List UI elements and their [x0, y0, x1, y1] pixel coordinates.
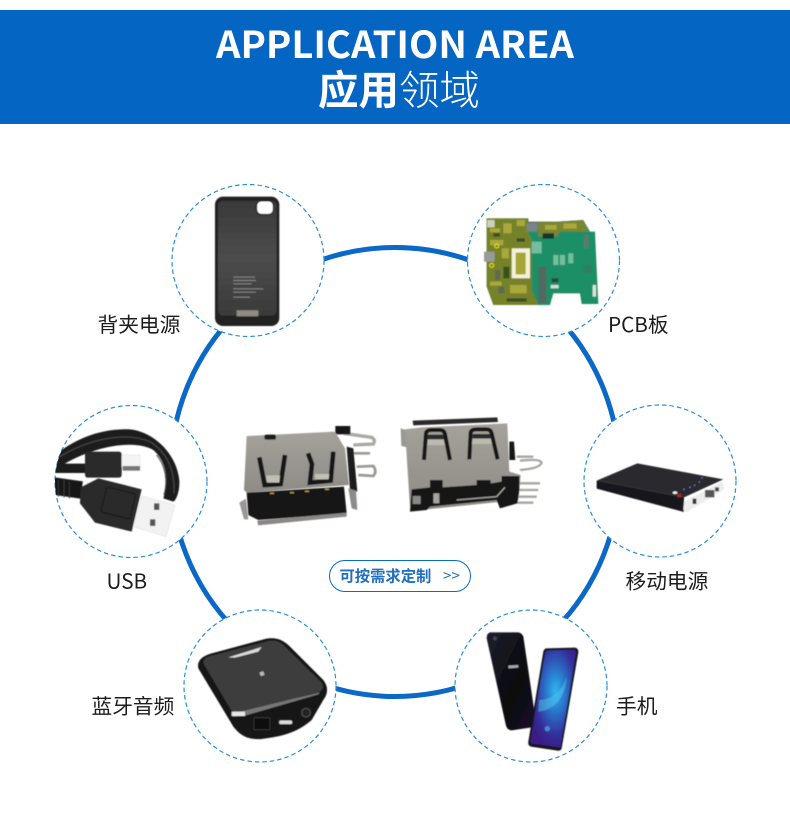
label: PCB: PCB板: [608, 308, 669, 338]
custom button: >>: [443, 565, 460, 586]
product: USB connector left: [239, 426, 375, 525]
panel: phones: [455, 610, 607, 762]
icon: USB cable: [53, 429, 179, 537]
panel: power bank: [584, 405, 736, 557]
title: English: APPLICATION AREA: [215, 15, 574, 69]
panel: USB cable: [53, 406, 207, 558]
label: phone: 手机: [616, 690, 658, 720]
panel: audio receiver: [184, 610, 336, 762]
icon: audio adapter: [198, 638, 327, 739]
label: power case: 背夹电源: [98, 308, 180, 338]
icon: circuit board: [484, 218, 598, 305]
header banner: [0, 10, 790, 124]
label: audio: 蓝牙音频: [92, 690, 175, 720]
product: USB connector right: [401, 417, 542, 512]
icon: smartphones: [487, 632, 578, 751]
custom button: 可按需求定制: [340, 564, 431, 586]
label: USB: USB: [106, 564, 147, 594]
label: power bank: 移动电源: [626, 564, 708, 594]
title: Chinese: 应用领域: [318, 58, 480, 116]
panel: power case: [172, 184, 324, 336]
custom button: [330, 560, 470, 592]
panel: PCB: [468, 184, 620, 336]
icon: power bank: [597, 463, 724, 512]
connecting ring: [170, 248, 620, 696]
icon: phone battery case: [215, 197, 279, 326]
